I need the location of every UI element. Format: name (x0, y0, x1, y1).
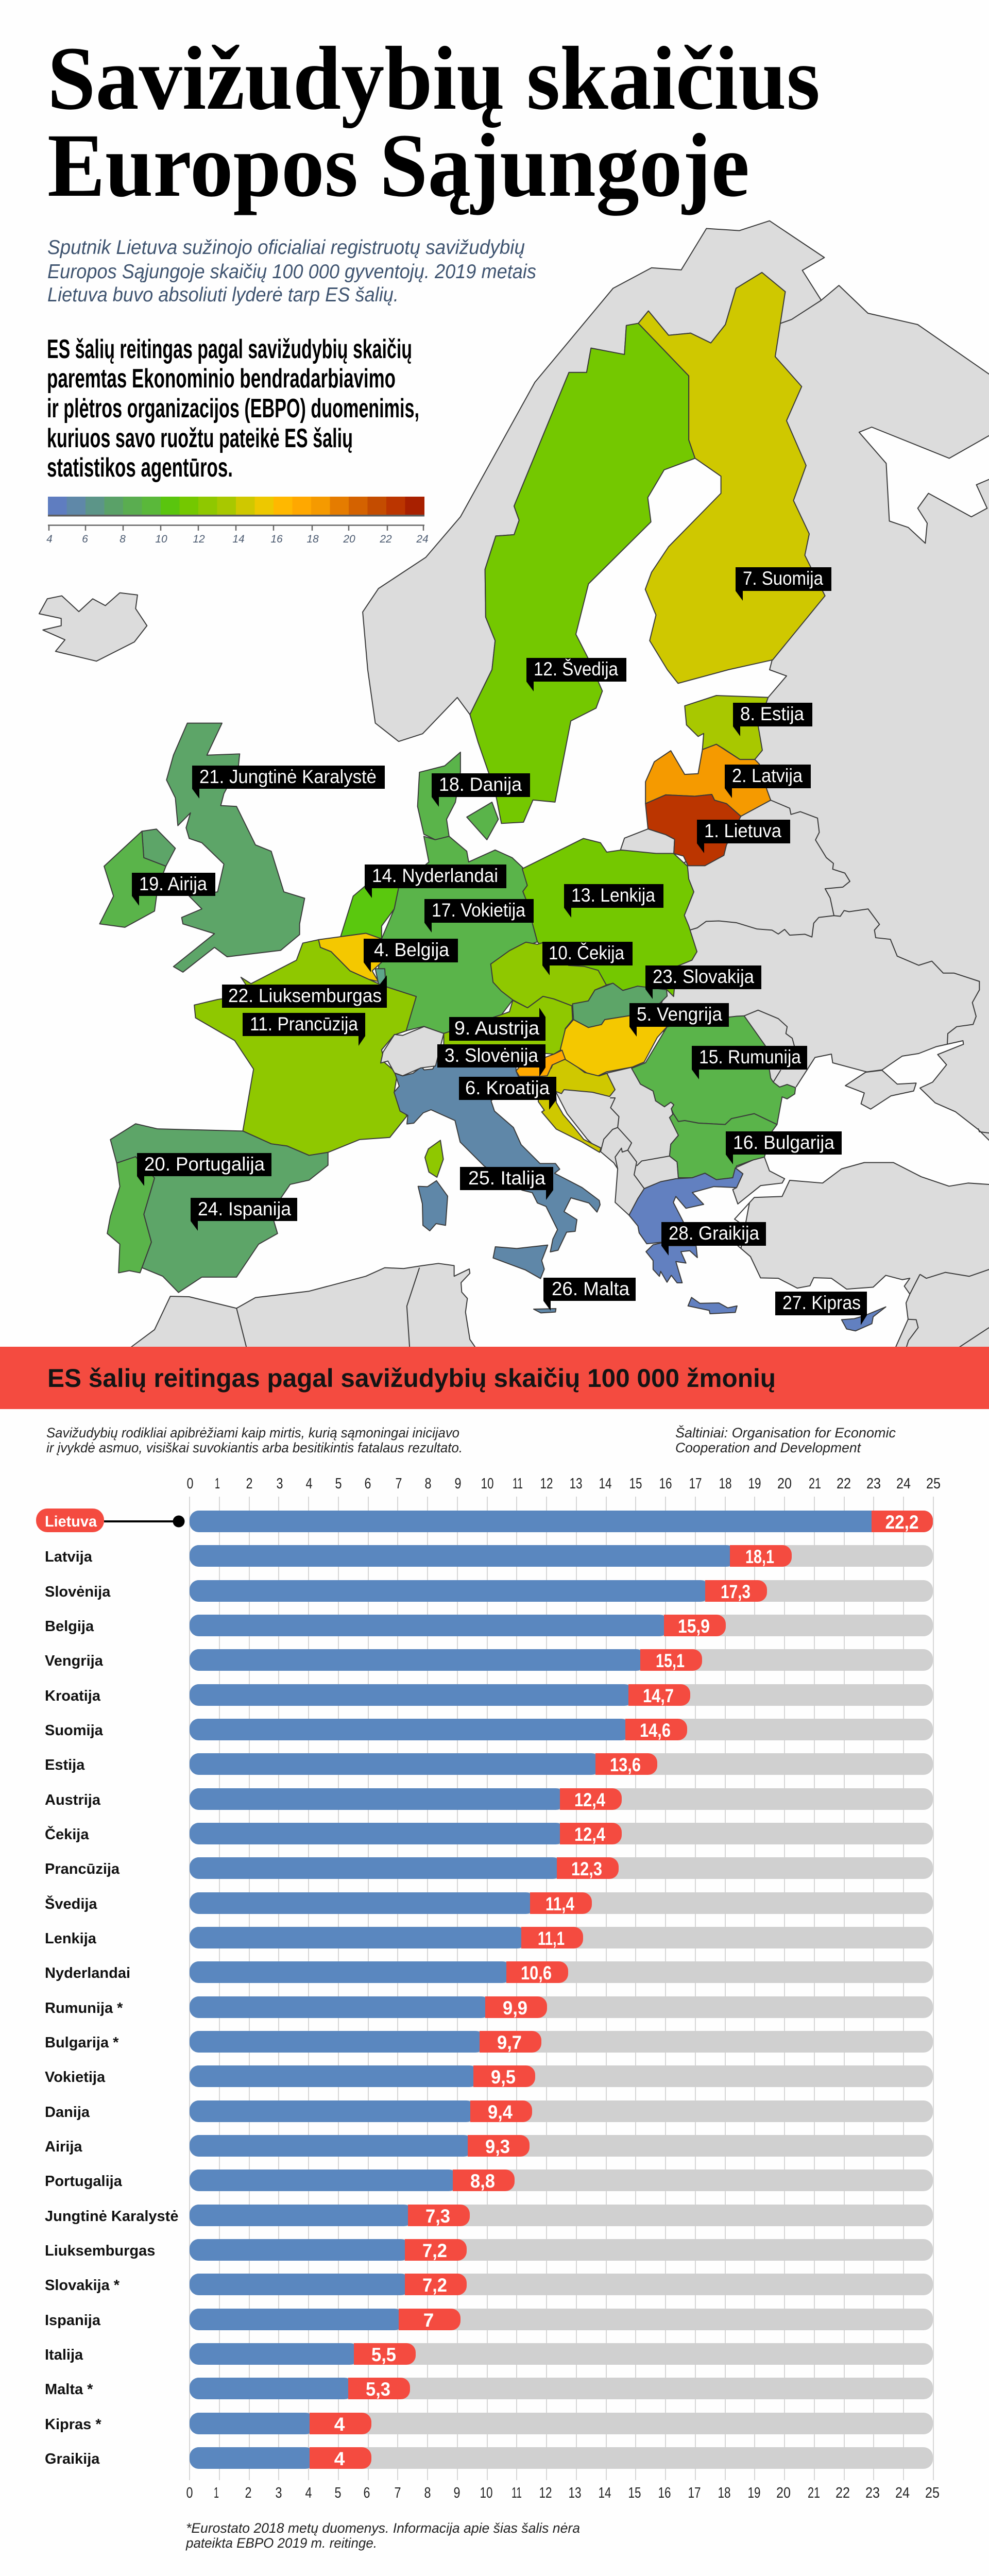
bottom axis numbers: 9 (453, 2485, 461, 2501)
country: Ireland (99, 831, 166, 927)
label: 16. Bulgarija (726, 1131, 842, 1164)
row: Nyderlandai: 10,6 (521, 1962, 552, 1984)
country: Finland (638, 273, 825, 683)
row: Estija: Estija (45, 1757, 85, 1773)
row: Liuksemburgas (45, 2239, 933, 2261)
row: Kroatija: 14,7 (643, 1685, 674, 1706)
colour legend: 20 (343, 533, 355, 545)
land: North Africa (123, 1263, 480, 1353)
label: 25. Italija (460, 1167, 553, 1200)
bottom axis numbers: 7 (395, 2485, 401, 2501)
country: Sweden (470, 324, 695, 823)
row: Graikija: Graikija (45, 2451, 100, 2467)
bottom axis numbers: 20 (776, 2485, 791, 2501)
description text: ir plėtros organizacijos (EBPO) duomenimis, (47, 394, 419, 423)
row: Rumunija: Rumunija * (45, 2000, 123, 2016)
intro text (47, 236, 536, 306)
footnote: *Eurostato 2018 metų duomenys. Informacija apie šias šalis nėra (186, 2520, 580, 2536)
row: Danija (45, 2100, 933, 2123)
top axis numbers: 3 (276, 1476, 283, 1492)
top axis numbers (186, 1476, 941, 1492)
bottom axis numbers: 22 (835, 2485, 850, 2501)
description text: paremtas Ekonominio bendradarbiavimo (47, 364, 396, 394)
country: Germany (379, 836, 537, 1033)
land: European Turkey (733, 1157, 785, 1204)
description text: statistikos agentūros. (47, 453, 233, 483)
row: Slovėnija (45, 1580, 933, 1602)
row: Čekija: Čekija (45, 1825, 89, 1843)
top axis numbers: 15 (629, 1476, 642, 1492)
bottom axis numbers (186, 2485, 940, 2501)
row: Švedija: 11,4 (545, 1893, 574, 1914)
label: 23. Slovakija (645, 965, 761, 999)
row: Nyderlandai (45, 1961, 933, 1984)
top axis numbers: 2 (246, 1476, 252, 1492)
label: 21. Jungtinė Karalystė: 21. Jungtinė Karalystė (199, 766, 377, 787)
country: Malta (534, 1309, 556, 1313)
label: 10. Čekija: 10. Čekija (549, 942, 624, 963)
definition note: ir įvykdė asmuo, visiškai suvokiantis arba besitikintis fatalaus rezultato. (46, 1440, 463, 1455)
row: Švedija (45, 1892, 933, 1914)
label: 24. Ispanija: 24. Ispanija (198, 1198, 291, 1219)
country: Greece (629, 1168, 743, 1314)
label: 8. Estija (733, 703, 812, 736)
land: Iceland (39, 593, 147, 661)
label: 3. Slovėnija (437, 1044, 545, 1077)
row: Kipras (45, 2413, 933, 2435)
red section header (0, 1347, 989, 1409)
row: Kroatija: Kroatija (45, 1688, 101, 1704)
definition note: Savižudybių rodikliai apibrėžiami kaip mirtis, kurią sąmoningai inicijavo (46, 1425, 459, 1440)
bottom axis numbers: 16 (658, 2485, 671, 2501)
row: Lietuva (36, 1509, 933, 1533)
row: Latvija (45, 1545, 933, 1567)
label: 22. Liuksemburgas: 22. Liuksemburgas (228, 985, 382, 1006)
land: Western Balkans (555, 1067, 678, 1215)
country: Latvia (645, 744, 771, 816)
label: 28. Graikija: 28. Graikija (669, 1223, 759, 1244)
bottom axis numbers: 3 (275, 2485, 282, 2501)
row: Vokietija: 9,5 (491, 2066, 516, 2088)
row: Austrija: 12,4 (574, 1789, 605, 1810)
bottom axis numbers: 18 (718, 2485, 730, 2501)
row: Lietuva: Lietuva (45, 1513, 97, 1530)
border: Moldova (744, 1010, 795, 1047)
row: Kroatija (45, 1684, 933, 1706)
top axis numbers: 18 (719, 1476, 731, 1492)
colour legend: 12 (193, 533, 205, 545)
label: 6. Kroatija: 6. Kroatija (465, 1077, 550, 1098)
row: Lenkija: Lenkija (45, 1930, 97, 1947)
description text: kuriuos savo ruožtu pateikė ES šalių (47, 423, 353, 453)
row: Slovėnija: Slovėnija (45, 1584, 111, 1600)
intro text: Europos Sąjungoje skaičių 100 000 gyventojų. 2019 metais (47, 261, 536, 283)
bottom axis numbers: 13 (569, 2485, 581, 2501)
label: 9. Austrija: 9. Austrija (454, 1018, 539, 1039)
label: 4. Belgija (364, 939, 458, 972)
row: Belgija (45, 1615, 933, 1637)
row: Suomija: Suomija (45, 1722, 104, 1739)
row: Ispanija: 7 (423, 2310, 434, 2331)
label: 4. Belgija: 4. Belgija (374, 939, 449, 960)
top axis numbers: 22 (837, 1476, 851, 1492)
row: Kipras: 4 (334, 2414, 345, 2435)
country: Hungary (560, 1015, 667, 1076)
title: Europos Sąjungoje (47, 115, 749, 216)
row: Vengrija: 15,1 (656, 1650, 685, 1671)
colour legend: 4 (46, 533, 53, 545)
top axis numbers: 12 (540, 1476, 553, 1492)
row: Lenkija: 11,1 (538, 1928, 565, 1949)
label: 17. Vokietija (424, 899, 534, 933)
country: Estonia (685, 696, 768, 759)
label: 15. Rumunija (692, 1046, 807, 1079)
row: Vengrija (45, 1649, 933, 1671)
colour legend: 24 (416, 533, 429, 545)
row: Liuksemburgas: Liuksemburgas (45, 2243, 155, 2259)
country: Corsica (France) (425, 1140, 444, 1177)
bottom axis numbers: 2 (245, 2485, 251, 2501)
row: Rumunija (45, 1996, 933, 2019)
colour legend: 8 (120, 533, 126, 545)
row: Prancūzija (45, 1857, 933, 1879)
country: Lithuania (645, 794, 741, 866)
row: Bulgarija: Bulgarija * (45, 2035, 119, 2051)
intro text: Lietuva buvo absoliuti lyderė tarp ES šalių. (47, 284, 399, 306)
label: 7. Suomija (736, 567, 831, 601)
label: 15. Rumunija: 15. Rumunija (699, 1046, 801, 1067)
label: 23. Slovakija: 23. Slovakija (653, 966, 754, 987)
country: Austria (444, 996, 573, 1054)
top axis numbers: 8 (424, 1476, 432, 1492)
row: Suomija (45, 1719, 933, 1741)
label: 3. Slovėnija: 3. Slovėnija (445, 1045, 538, 1066)
bar chart (36, 1509, 933, 2469)
bottom axis numbers: 5 (335, 2485, 341, 2501)
label: 8. Estija: 8. Estija (740, 703, 804, 724)
row: Kipras: Kipras * (45, 2416, 101, 2433)
map labels (132, 567, 867, 1325)
top axis numbers: 11 (513, 1476, 523, 1492)
label: 19. Airija (132, 873, 215, 906)
row: Malta (45, 2378, 933, 2400)
country: United Kingdom (142, 723, 304, 972)
colour legend: 14 (232, 533, 245, 545)
sources note: Šaltiniai: Organisation for Economic (675, 1425, 896, 1440)
label: 25. Italija: 25. Italija (468, 1167, 545, 1189)
label: 18. Danija: 18. Danija (439, 774, 522, 795)
country: Switzerland (381, 1027, 444, 1076)
row: Latvija: 18,1 (745, 1546, 774, 1567)
description text: ES šalių reitingas pagal savižudybių skaičių (47, 334, 412, 364)
row: Vokietija: Vokietija (45, 2069, 106, 2086)
row: Slovakija: 7,2 (422, 2275, 447, 2296)
colour legend: 18 (306, 533, 319, 545)
bottom axis numbers: 17 (688, 2485, 701, 2501)
label: 16. Bulgarija: 16. Bulgarija (733, 1132, 834, 1153)
bottom axis numbers: 15 (628, 2485, 641, 2501)
row: Suomija: 14,6 (640, 1720, 671, 1741)
top axis numbers: 20 (777, 1476, 792, 1492)
border: Belarus north and east (771, 800, 850, 916)
colour legend: 22 (379, 533, 392, 545)
country: Slovakia (573, 983, 667, 1027)
country: Netherlands (340, 886, 399, 939)
colour legend (46, 497, 429, 545)
land: Crimea (845, 1070, 916, 1109)
description text (47, 334, 419, 483)
row: Lenkija (45, 1927, 933, 1949)
country: Denmark (418, 752, 498, 840)
row: Austrija: Austrija (45, 1792, 101, 1808)
row: Švedija: Švedija (45, 1895, 97, 1912)
row: Prancūzija: Prancūzija (45, 1861, 120, 1877)
label: 9. Austrija (449, 1008, 545, 1041)
bottom axis numbers: 23 (865, 2485, 880, 2501)
row: Portugalija: Portugalija (45, 2173, 123, 2190)
top axis numbers: 23 (866, 1476, 881, 1492)
country: Croatia (538, 1059, 615, 1153)
row: Liuksemburgas: 7,2 (422, 2240, 447, 2261)
row: Jungtinė Karalystė (45, 2205, 933, 2227)
bottom axis numbers: 4 (305, 2485, 312, 2501)
row: Belgija: 15,9 (678, 1616, 710, 1637)
sources note: Cooperation and Development (675, 1440, 861, 1455)
top axis numbers: 17 (689, 1476, 702, 1492)
label: 26. Malta (543, 1278, 636, 1311)
country: Romania (632, 1016, 795, 1125)
country: Belgium (318, 933, 382, 981)
label: 2. Latvija (725, 765, 811, 798)
label: 13. Lenkija: 13. Lenkija (571, 885, 655, 906)
bottom axis numbers: 8 (424, 2485, 431, 2501)
top axis numbers: 13 (570, 1476, 582, 1492)
row: Austrija (45, 1788, 933, 1810)
top axis numbers: 7 (396, 1476, 402, 1492)
row: Slovakija: Slovakija * (45, 2277, 120, 2294)
row: Malta: Malta * (45, 2381, 93, 2398)
footnote (185, 2520, 580, 2551)
colour legend: 10 (155, 533, 167, 545)
row: Danija: Danija (45, 2104, 90, 2121)
country: Cyprus (842, 1307, 886, 1331)
row: Nyderlandai: Nyderlandai (45, 1965, 130, 1981)
row: Italija: Italija (45, 2347, 83, 2363)
row: Portugalija: 8,8 (470, 2171, 495, 2192)
label: 20. Portugalija (137, 1153, 271, 1186)
row: Ispanija (45, 2309, 933, 2331)
colour legend: 6 (82, 533, 88, 545)
top axis numbers: 24 (896, 1476, 911, 1492)
row: Vokietija (45, 2065, 933, 2088)
label: 17. Vokietija: 17. Vokietija (432, 900, 525, 921)
sea: Black Sea and Mediterranean (668, 1041, 989, 1352)
label: 28. Graikija (661, 1222, 766, 1256)
footnote: pateikta EBPO 2019 m. reitinge. (185, 2535, 377, 2551)
top axis numbers: 14 (599, 1476, 612, 1492)
row: Lietuva: 22,2 (885, 1512, 919, 1533)
bottom axis numbers: 0 (186, 2485, 193, 2501)
label: 2. Latvija: 2. Latvija (732, 765, 803, 786)
label: 14. Nyderlandai (365, 865, 506, 898)
chart grid lines (190, 1497, 933, 2480)
intro text: Sputnik Lietuva sužinojo oficialiai registruotų savižudybių (47, 236, 525, 259)
label: 22. Liuksemburgas (222, 975, 387, 1008)
country: Spain (110, 1124, 328, 1293)
country: Bulgaria (670, 1114, 777, 1180)
map of Europe (39, 221, 989, 1355)
top axis numbers: 9 (454, 1476, 462, 1492)
label: 11. Prancūzija: 11. Prancūzija (250, 1013, 358, 1035)
title: Savižudybių skaičius (47, 28, 820, 129)
sources note (675, 1425, 896, 1455)
row: Čekija: 12,4 (574, 1824, 605, 1845)
bottom axis numbers: 25 (925, 2485, 940, 2501)
label: 18. Danija (432, 773, 530, 807)
bottom axis numbers: 12 (539, 2485, 552, 2501)
top axis numbers: 0 (186, 1476, 194, 1492)
bottom axis numbers: 14 (599, 2485, 611, 2501)
country: Sicily (Italy) (493, 1245, 548, 1279)
label: 11. Prancūzija (243, 1013, 365, 1046)
label: 24. Ispanija (191, 1198, 297, 1231)
row: Airija: 9,3 (485, 2136, 510, 2157)
country: Sardinia (Italy) (418, 1181, 448, 1231)
bottom axis numbers: 11 (511, 2485, 522, 2501)
land: Kaliningrad (620, 829, 675, 854)
land: Norway (363, 221, 824, 741)
row: Prancūzija: 12,3 (571, 1858, 602, 1879)
colour legend: 16 (270, 533, 283, 545)
bottom axis numbers: 1 (214, 2485, 219, 2501)
bottom axis numbers: 24 (895, 2485, 910, 2501)
row: Graikija: 4 (334, 2448, 345, 2469)
top axis numbers: 25 (926, 1476, 941, 1492)
bottom axis numbers: 10 (480, 2485, 492, 2501)
top axis numbers: 5 (335, 1476, 342, 1492)
country: Italy (394, 1051, 600, 1252)
row: Airija: Airija (45, 2139, 82, 2155)
label: 27. Kipras (775, 1292, 867, 1325)
land: Russia, Belarus, Ukraine and Turkey (659, 285, 989, 1355)
label: 1. Lietuva: 1. Lietuva (704, 820, 781, 841)
row: Graikija (45, 2447, 933, 2469)
label: 19. Airija: 19. Airija (139, 873, 207, 894)
definition note (46, 1425, 463, 1455)
red section header: ES šalių reitingas pagal savižudybių skaičių 100 000 žmonių (47, 1364, 776, 1393)
top axis numbers: 4 (306, 1476, 312, 1492)
label: 12. Švedija (526, 658, 626, 691)
row: Bulgarija (45, 2031, 933, 2053)
row: Jungtinė Karalystė: 7,3 (425, 2206, 450, 2227)
country: Slovenia (516, 1050, 565, 1076)
top axis numbers: 10 (481, 1476, 493, 1492)
label: 21. Jungtinė Karalystė (192, 766, 385, 799)
row: Slovakija (45, 2274, 933, 2296)
country: France (194, 940, 416, 1156)
bottom axis numbers: 6 (364, 2485, 370, 2501)
country: Czechia (491, 942, 606, 1008)
row: Malta: 5,3 (366, 2379, 390, 2400)
label: 1. Lietuva (697, 820, 790, 853)
label: 6. Kroatija (459, 1077, 556, 1110)
top axis numbers: 6 (365, 1476, 371, 1492)
country: Portugal (107, 1157, 155, 1273)
bottom axis numbers: 19 (748, 2485, 760, 2501)
row: Italija: 5,5 (371, 2344, 396, 2365)
title (47, 28, 820, 216)
top axis numbers: 16 (659, 1476, 672, 1492)
row: Portugalija (45, 2170, 933, 2192)
label: 20. Portugalija: 20. Portugalija (144, 1154, 265, 1175)
label: 12. Švedija: 12. Švedija (534, 658, 618, 680)
label: 5. Vengrija (629, 1003, 729, 1037)
row: Estija (45, 1753, 933, 1775)
row: Čekija (45, 1823, 933, 1845)
top axis numbers: 19 (748, 1476, 761, 1492)
label: 27. Kipras: 27. Kipras (782, 1292, 861, 1313)
label: 26. Malta: 26. Malta (552, 1278, 629, 1299)
bottom axis numbers: 21 (808, 2485, 820, 2501)
top axis numbers: 21 (809, 1476, 821, 1492)
row: Ispanija: Ispanija (45, 2312, 101, 2329)
label: 7. Suomija: 7. Suomija (743, 568, 823, 589)
row: Vengrija: Vengrija (45, 1653, 104, 1669)
label: 14. Nyderlandai: 14. Nyderlandai (372, 865, 498, 886)
row: Belgija: Belgija (45, 1618, 94, 1635)
row: Slovėnija: 17,3 (721, 1581, 751, 1602)
label: 10. Čekija (542, 942, 633, 975)
row: Bulgarija: 9,7 (497, 2032, 522, 2053)
row: Airija (45, 2135, 933, 2157)
row: Jungtinė Karalystė: Jungtinė Karalystė (45, 2208, 178, 2225)
label: 13. Lenkija (564, 884, 663, 918)
row: Danija: 9,4 (488, 2102, 513, 2123)
row: Italija (45, 2343, 933, 2365)
row: Rumunija: 9,9 (503, 1997, 527, 2019)
border: Belarus and Ukraine (690, 909, 979, 1044)
top axis numbers: 1 (215, 1476, 220, 1492)
label: 5. Vengrija: 5. Vengrija (637, 1004, 722, 1025)
country: Luxembourg (376, 969, 386, 988)
row: Estija: 13,6 (610, 1754, 641, 1775)
sea: White Sea (859, 427, 989, 543)
country: Poland (522, 838, 697, 996)
row: Latvija: Latvija (45, 1549, 93, 1565)
